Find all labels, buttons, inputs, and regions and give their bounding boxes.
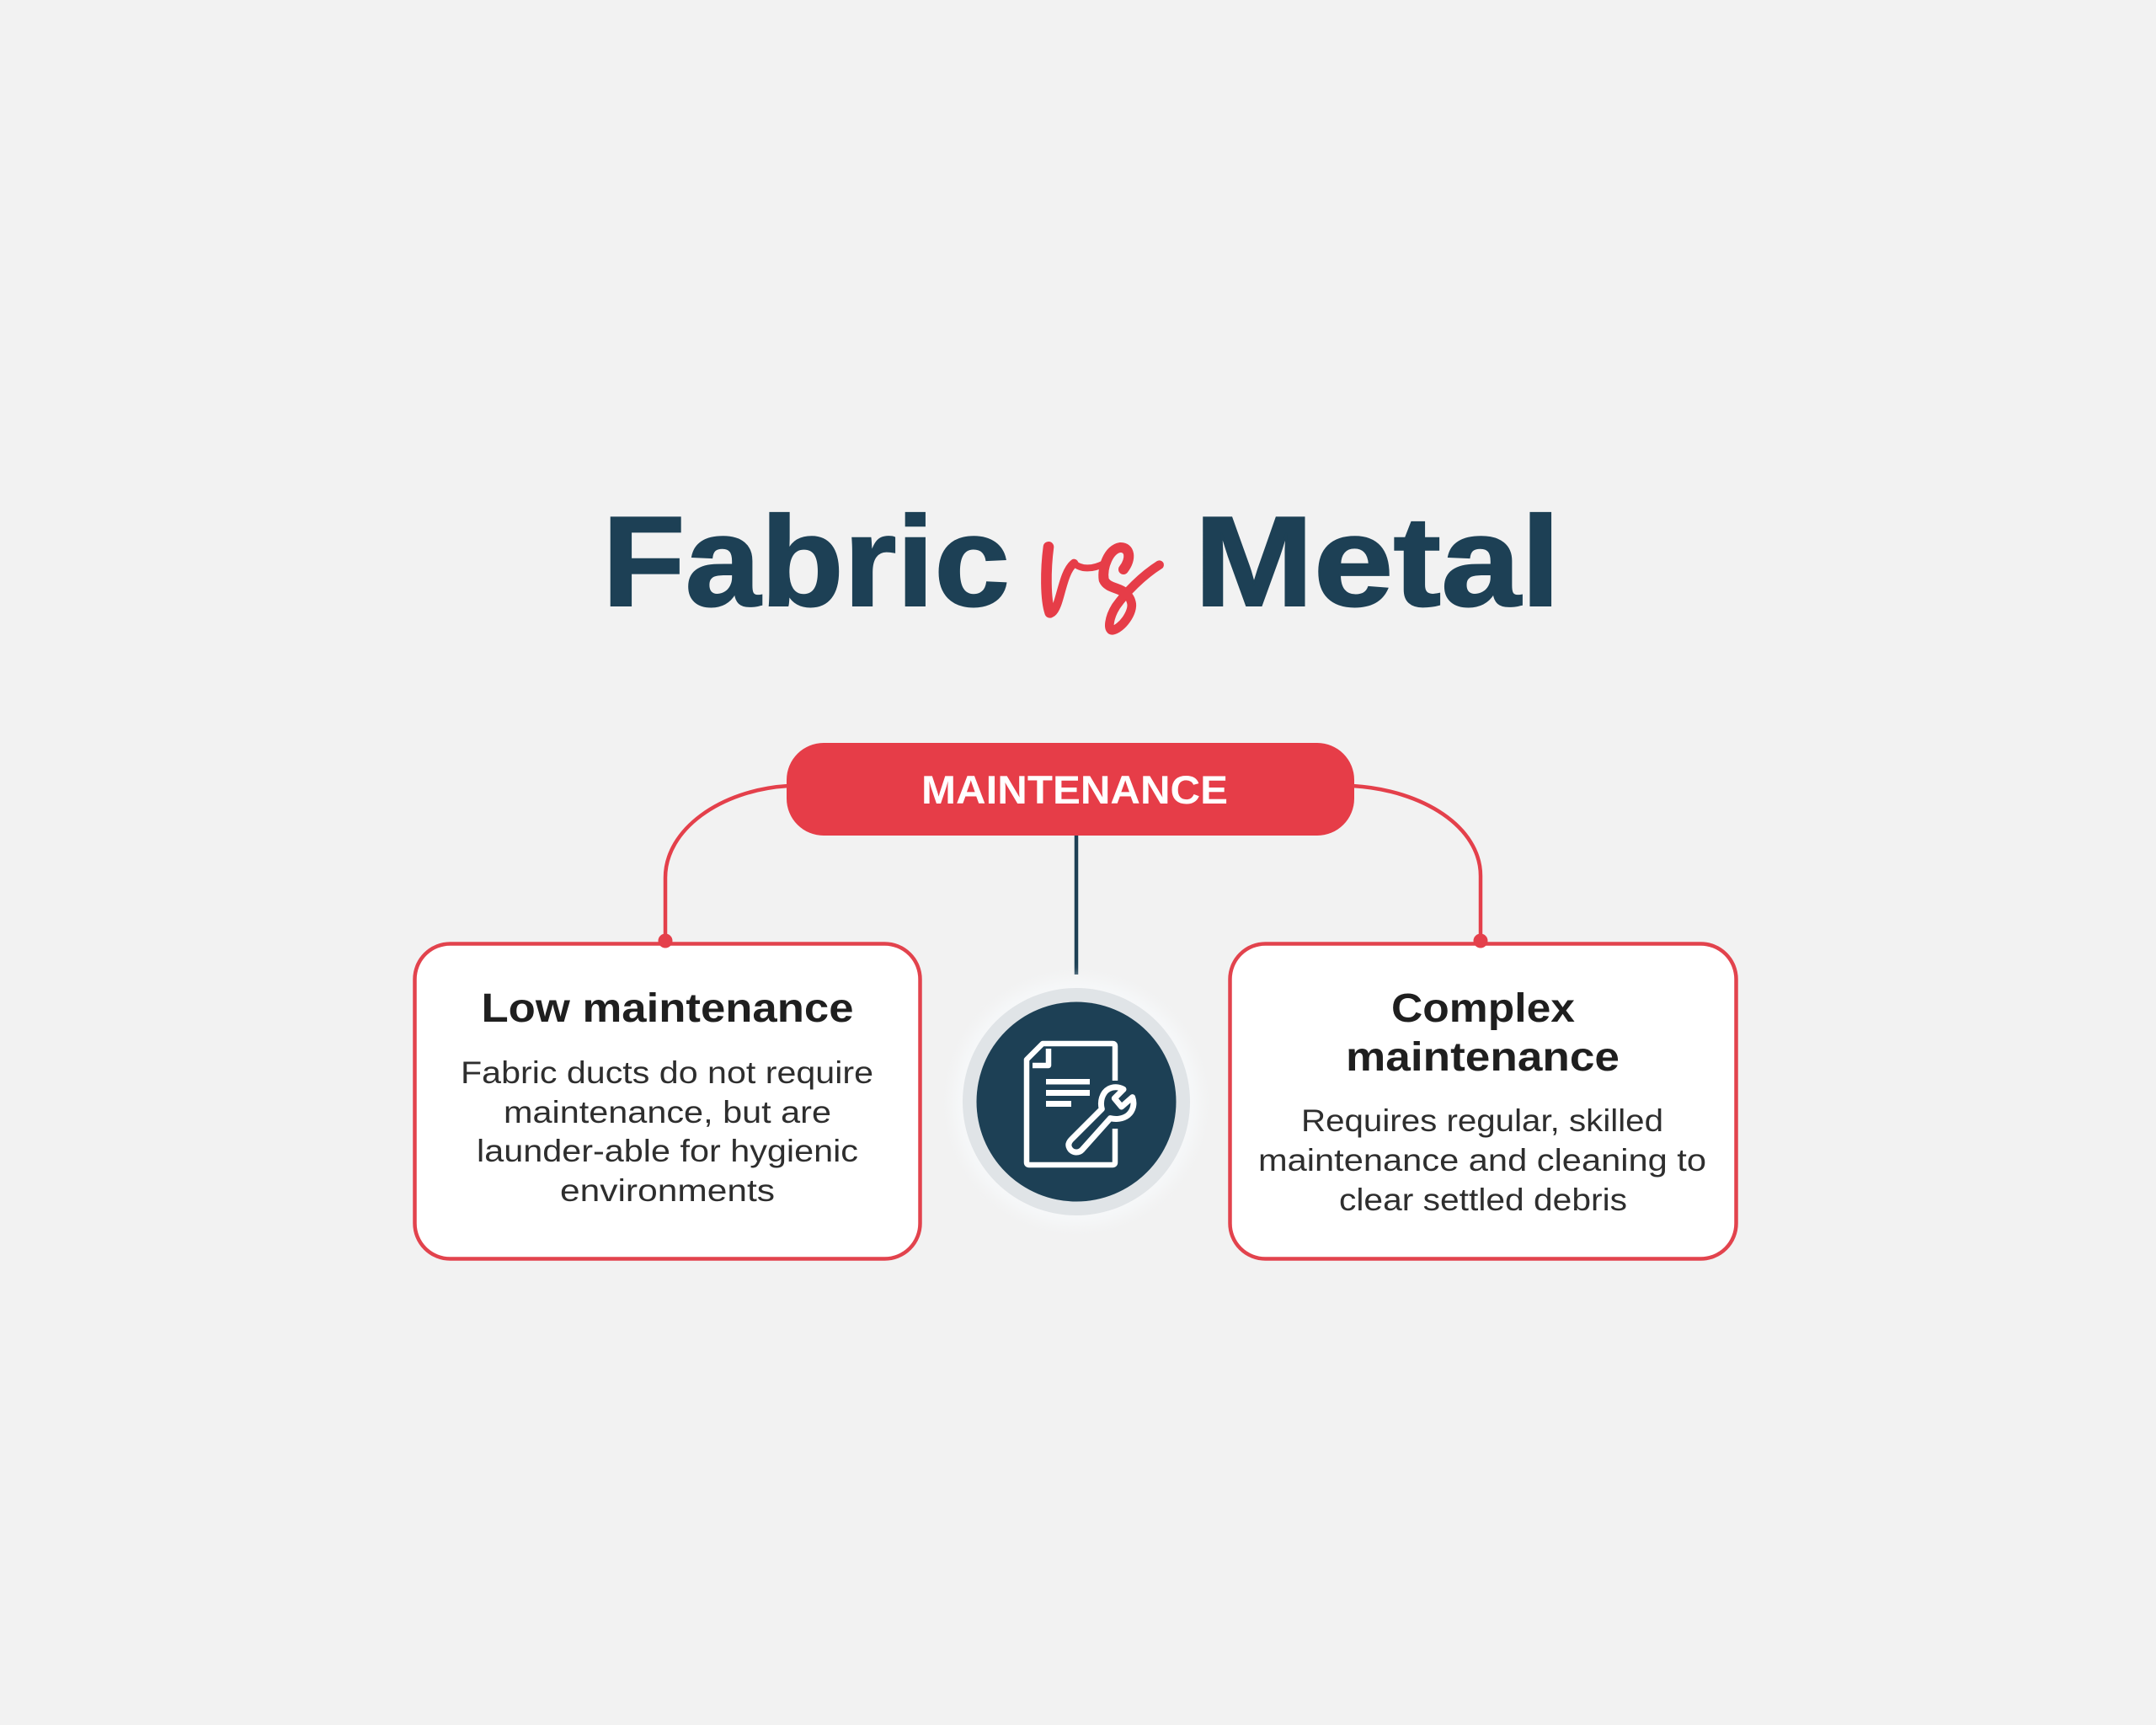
- title word: Fabric: Fabric: [602, 490, 1010, 633]
- icon: document with wrench: [953, 979, 1199, 1225]
- card heading: maintenance: [1346, 1035, 1620, 1080]
- card body text: maintenance, but are: [504, 1095, 831, 1130]
- card box: [1230, 943, 1737, 1258]
- card body text: Fabric ducts do not require: [461, 1055, 873, 1090]
- card body text: [461, 1055, 873, 1208]
- card heading: [1346, 986, 1620, 1080]
- card body text: clear settled debris: [1339, 1183, 1627, 1217]
- connector: center line: [1075, 834, 1078, 975]
- card body text: [1258, 1103, 1706, 1217]
- panel: fabric low maintenance: [414, 943, 920, 1258]
- title: [602, 490, 1561, 633]
- card body text: environments: [560, 1173, 775, 1208]
- card box: [414, 943, 920, 1258]
- title word: Metal: Metal: [1194, 490, 1561, 633]
- card body text: launder-able for hygienic: [477, 1134, 858, 1168]
- card heading: Low maintenance: [482, 986, 854, 1031]
- card heading: Complex: [1391, 986, 1575, 1031]
- pill label: MAINTENANCE: [921, 767, 1228, 812]
- connector: right curve: [1353, 786, 1487, 948]
- category pill: maintenance: [787, 743, 1354, 836]
- panel: metal complex maintenance: [1230, 943, 1737, 1258]
- card body text: Requires regular, skilled: [1301, 1103, 1663, 1138]
- connector: left curve: [659, 786, 788, 948]
- title script: vs: [1046, 547, 1160, 630]
- card body text: maintenance and cleaning to: [1258, 1143, 1706, 1178]
